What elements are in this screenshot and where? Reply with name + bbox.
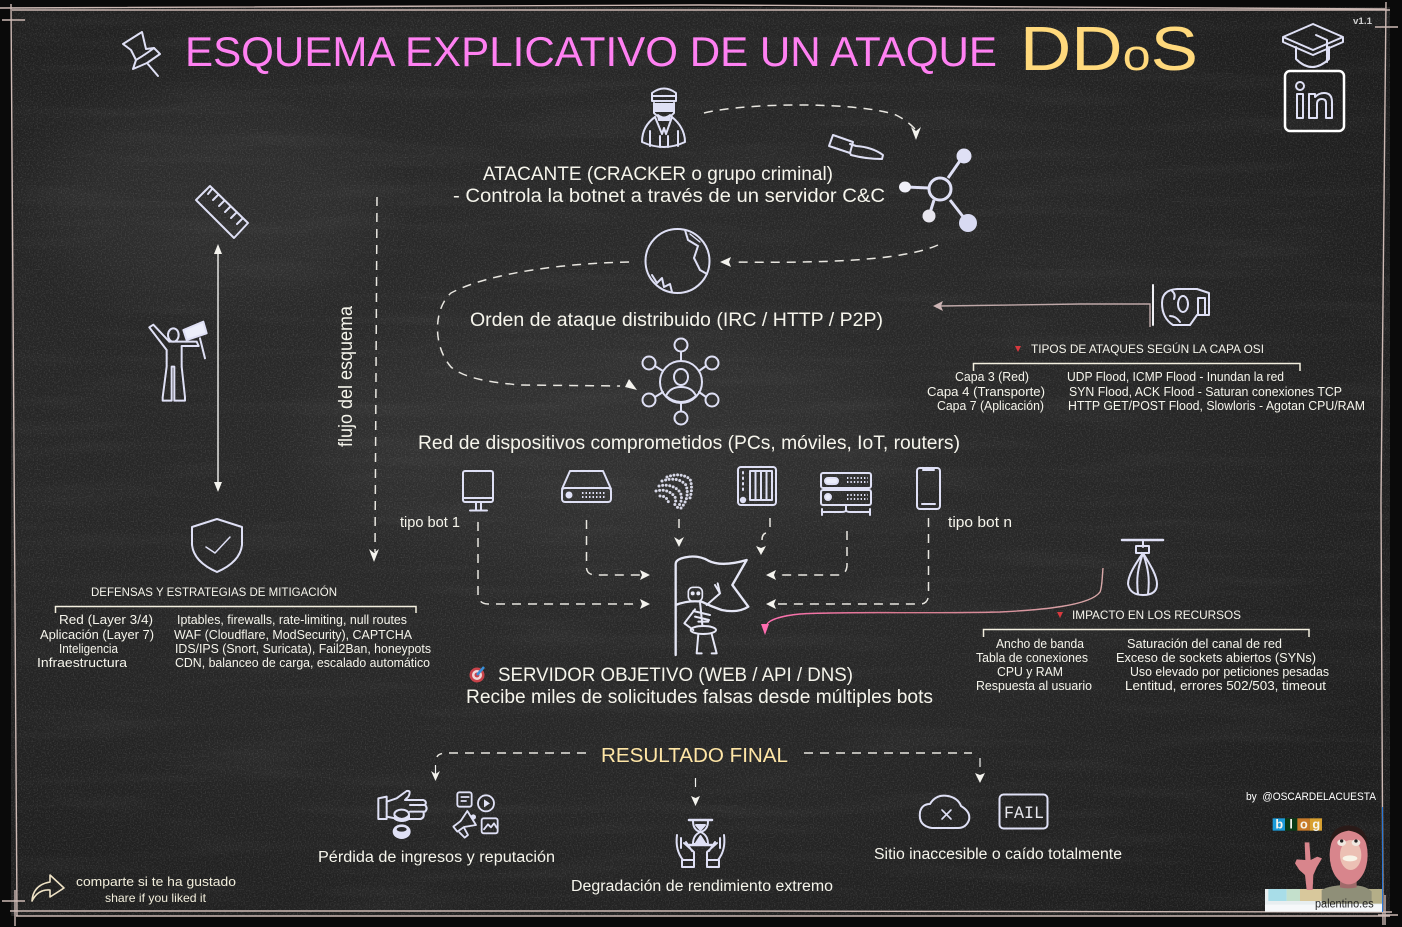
icon: FAIL box	[1000, 794, 1048, 828]
blue rule	[1382, 807, 1384, 912]
impact rows: Ancho de banda	[996, 637, 1084, 651]
author credit: by @OSCARDELACUESTA	[1246, 791, 1377, 803]
defenses rows: WAF (Cloudflare, ModSecurity), CAPTCHA	[174, 628, 413, 642]
impact rows	[976, 637, 1329, 693]
text: degraded performance: Degradación de rendimiento extremo	[571, 878, 833, 895]
text: attack order: Orden de ataque distribuido (IRC / HTTP / P2P)	[470, 310, 883, 331]
attacker description: - Controla la botnet a través de un servidor C&C	[453, 186, 885, 207]
logo: blog: o	[1300, 818, 1308, 832]
defenses heading: DEFENSAS Y ESTRATEGIAS DE MITIGACIÓN	[91, 584, 337, 599]
attack rows: SYN Flood, ACK Flood - Saturan conexiones TCP	[1069, 385, 1342, 399]
defenses rows: IDS/IPS (Snort, Suricata), Fail2Ban, honeypots	[175, 642, 431, 656]
attack rows: UDP Flood, ICMP Flood - Inundan la red	[1067, 370, 1284, 384]
icon: globe	[646, 229, 710, 293]
attack types heading: TIPOS DE ATAQUES SEGÚN LA CAPA OSI	[1031, 341, 1264, 356]
arrow: attacker to C2	[704, 105, 921, 140]
icon: iota dots	[656, 475, 692, 508]
impact rows: CPU y RAM	[997, 665, 1063, 679]
share spanish: comparte si te ha gustado	[76, 874, 236, 889]
icon: target emoji	[470, 667, 484, 682]
impact rows: Uso elevado por peticiones pesadas	[1130, 665, 1329, 679]
impact rows: Respuesta al usuario	[976, 679, 1092, 693]
icon: ruler	[196, 186, 248, 238]
bracket	[984, 630, 1309, 637]
share text	[76, 874, 236, 905]
defenses rows	[37, 613, 431, 670]
icon: media and megaphone	[453, 792, 498, 838]
defenses rows: Aplicación (Layer 7)	[40, 628, 154, 642]
heading: final result: RESULTADO FINAL	[601, 745, 788, 767]
label: tipo bot 1: tipo bot 1	[400, 515, 460, 531]
logo: blog: b	[1275, 818, 1283, 832]
version label: v1.1	[1353, 16, 1373, 27]
icon: smartphone	[917, 468, 940, 509]
logo: blog: l	[1289, 818, 1293, 832]
attack rows	[927, 370, 1365, 413]
server description: Recibe miles de solicitudes falsas desde múltiples bots	[466, 687, 933, 708]
panel: defenses	[37, 584, 431, 670]
body	[1322, 885, 1372, 904]
defenses rows: Infraestructura	[37, 656, 127, 670]
icon: linkedin	[1285, 71, 1344, 131]
icon: whisk	[1122, 540, 1163, 595]
arrows: bots to server	[478, 518, 928, 609]
impact rows: Exceso de sockets abiertos (SYNs)	[1116, 651, 1316, 665]
impact heading: IMPACTO EN LOS RECURSOS	[1072, 608, 1241, 622]
attack rows: Capa 7 (Aplicación)	[937, 399, 1044, 413]
icon: hourglass in hands	[677, 820, 724, 867]
head	[1330, 826, 1368, 884]
text: site down: Sitio inaccesible o caído totalmente	[874, 846, 1122, 863]
share english: share if you liked it	[105, 891, 207, 905]
icon: boxing glove	[1153, 285, 1209, 325]
icon: person with sign	[149, 322, 207, 401]
arrow: scheme flow	[369, 197, 379, 562]
icon: flag with skeleton	[676, 557, 748, 655]
logo: blog: g	[1312, 818, 1320, 832]
icon: shield	[192, 519, 242, 572]
red marker	[1015, 346, 1021, 352]
icon: bullet	[829, 135, 883, 159]
icon: cloud with x	[920, 796, 969, 828]
red marker	[1057, 612, 1063, 618]
icon: server rack	[821, 473, 871, 515]
arrow: resources to server	[761, 568, 1103, 635]
impact rows: Tabla de conexiones	[976, 651, 1088, 665]
panel: attack types	[927, 341, 1365, 413]
arrow: globe to botnet	[437, 262, 637, 390]
arrow: attack type	[933, 301, 1150, 327]
bracket	[974, 364, 1300, 371]
attacker text	[453, 164, 885, 207]
arrow: C2 to globe	[720, 245, 938, 267]
title: main text: ESQUEMA EXPLICATIVO DE UN ATAQUE	[185, 28, 997, 75]
title: DDoS: DD oS	[1020, 15, 1198, 84]
logo: blog	[1273, 818, 1322, 832]
attacker heading: ATACANTE (CRACKER o grupo criminal)	[483, 164, 833, 185]
bracket	[56, 606, 416, 613]
icon: botnet hub	[642, 338, 718, 424]
icon: share arrow	[32, 875, 64, 901]
palentino text: palentino.es	[1315, 896, 1374, 910]
impact rows: Saturación del canal de red	[1127, 637, 1282, 651]
panel: resource impact	[976, 608, 1329, 693]
labels: bot types	[400, 515, 1012, 531]
text: target server	[466, 665, 933, 708]
icon: push pin	[123, 32, 160, 76]
attack rows: HTTP GET/POST Flood, Slowloris - Agotan CPU/RAM	[1068, 399, 1365, 413]
text: compromised devices: Red de dispositivos comprometidos (PCs, móviles, IoT, routers)	[418, 433, 960, 454]
icon: C2 network	[899, 148, 977, 232]
avatar: character	[1265, 825, 1382, 912]
impact rows: Lentitud, errores 502/503, timeout	[1125, 679, 1327, 693]
label: flow scheme: flujo del esquema	[336, 306, 357, 447]
text: lost revenue: Pérdida de ingresos y reputación	[318, 849, 555, 866]
defenses rows: CDN, balanceo de carga, escalado automático	[175, 656, 430, 670]
hand	[1295, 842, 1322, 890]
label: tipo bot n: tipo bot n	[948, 515, 1012, 531]
title	[123, 28, 997, 76]
attack rows: Capa 3 (Red)	[955, 370, 1029, 384]
arrow: two-way vertical	[214, 244, 222, 492]
defenses rows: Iptables, firewalls, rate-limiting, null routes	[177, 613, 407, 627]
icon: FAIL box: FAIL	[1004, 804, 1044, 824]
attack rows: Capa 4 (Transporte)	[927, 385, 1045, 399]
image strip	[1265, 889, 1382, 912]
defenses rows: Inteligencia	[59, 642, 118, 656]
icon: graduation cap	[1283, 24, 1343, 67]
arrows: final result	[431, 753, 985, 806]
icon: hand with coins	[378, 791, 427, 838]
icon: attacker	[642, 88, 685, 147]
icon: disk drive	[562, 471, 611, 502]
server heading: SERVIDOR OBJETIVO (WEB / API / DNS)	[498, 665, 853, 686]
defenses rows: Red (Layer 3/4)	[59, 613, 153, 627]
icon: desktop monitor	[463, 471, 493, 510]
icon: NAS box	[738, 467, 776, 505]
